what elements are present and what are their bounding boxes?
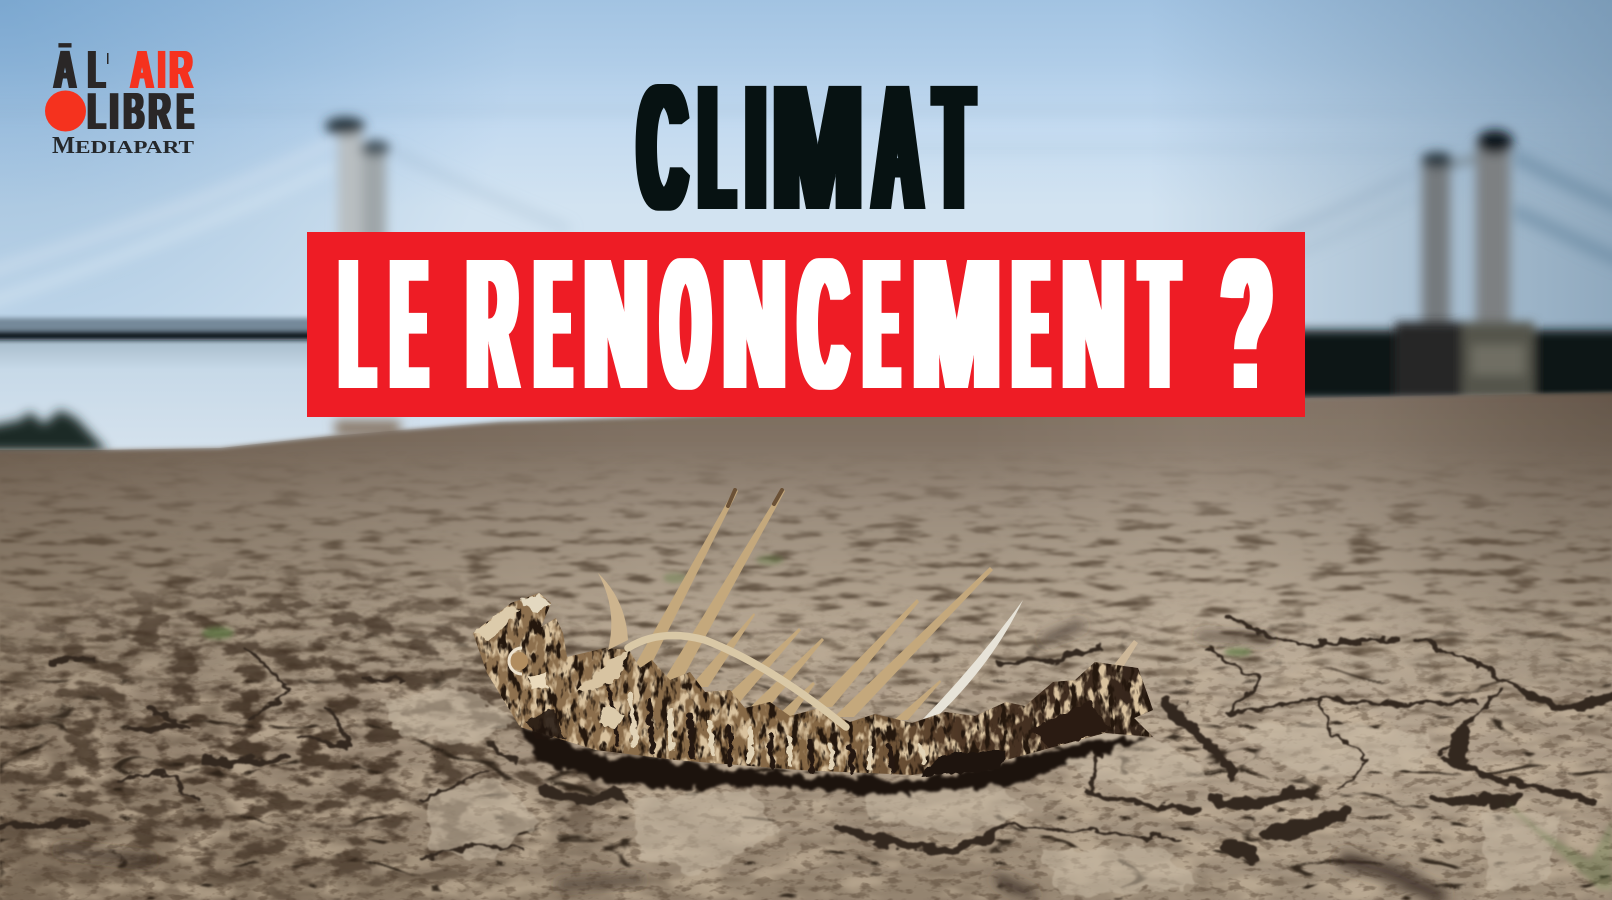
sky — [0, 0, 1612, 460]
headline: LE RENONCEMENT ?: E — [536, 221, 569, 428]
logo text: LIBRE: I — [110, 83, 118, 141]
vertebrae spines — [610, 690, 925, 772]
dried ground base — [0, 390, 1612, 900]
red banner with headline — [307, 221, 1305, 428]
headline: LE RENONCEMENT ?: E — [866, 221, 897, 428]
dark cavity in spine — [525, 700, 1110, 776]
dark bush on the far bank — [0, 410, 108, 452]
headline: LE RENONCEMENT ?: M — [913, 221, 1000, 428]
headline: LE RENONCEMENT ?: N — [585, 221, 647, 428]
blurred foreground cracks — [60, 625, 1438, 895]
logo text: AIR: R — [170, 40, 192, 100]
logo text: LIBRE: R — [149, 83, 170, 141]
red banner — [307, 232, 1305, 417]
upright ribs — [634, 488, 1138, 720]
headline: LE RENONCEMENT ?: E — [392, 221, 425, 428]
text: T — [936, 47, 972, 247]
logo text: À L': L — [88, 40, 105, 100]
title: CLIMAT: C — [639, 47, 686, 247]
bright sunlit mud plates — [380, 690, 1560, 895]
curved dorsal spine — [598, 573, 628, 650]
title: CLIMAT: A — [874, 47, 921, 247]
headline: LE RENONCEMENT ?: T — [1142, 221, 1177, 428]
logo text: À L': Ā — [54, 40, 76, 100]
logo text: LIBRE: B — [124, 83, 144, 141]
fish skeleton on the cracked ground — [460, 488, 1160, 795]
headline: LE RENONCEMENT ?: C — [800, 221, 847, 428]
blurred bridge on the left — [0, 117, 570, 436]
logo text: LIBRE: L — [88, 83, 105, 141]
blurred bridge on the right — [1270, 130, 1612, 400]
headline: LE RENONCEMENT ?: R — [468, 221, 517, 428]
title: CLIMAT: I — [747, 47, 765, 247]
eye socket ring — [509, 648, 528, 674]
title: CLIMAT: M — [772, 47, 863, 247]
large dried-mud cracks — [0, 620, 1612, 860]
white rib — [892, 600, 1023, 750]
headline: LE RENONCEMENT ?: L — [341, 221, 373, 428]
logo apostrophe — [107, 53, 108, 64]
headline: LE RENONCEMENT ?: N — [724, 221, 785, 428]
logo: À l'air libre Mediapart — [45, 40, 194, 159]
skeleton body — [473, 593, 1153, 775]
red banner with headline: ? — [1223, 221, 1272, 428]
headline: LE RENONCEMENT ?: E — [1014, 221, 1047, 428]
logo text: AIR: A — [131, 40, 153, 100]
logo text: Mediapart: M — [52, 133, 75, 159]
title: CLIMAT: L — [700, 47, 733, 247]
text: E — [177, 83, 193, 141]
dark rib tips — [728, 490, 782, 506]
distant soil texture — [0, 470, 1612, 899]
shadow under skeleton — [520, 725, 1150, 795]
logo text: AIR: I — [158, 40, 165, 100]
headline: LE RENONCEMENT ?: O — [662, 221, 709, 428]
bony highlights on vertebrae — [473, 594, 628, 730]
green weeds — [202, 555, 1612, 890]
logo text: Mediapart: EDIAPART — [75, 137, 194, 157]
headline: LE RENONCEMENT ?: N — [1063, 221, 1124, 428]
river water, left side — [0, 340, 420, 460]
long curved rib — [628, 636, 846, 727]
foreground mud plates and crack texture — [0, 560, 1612, 900]
logo red circle — [45, 90, 86, 132]
